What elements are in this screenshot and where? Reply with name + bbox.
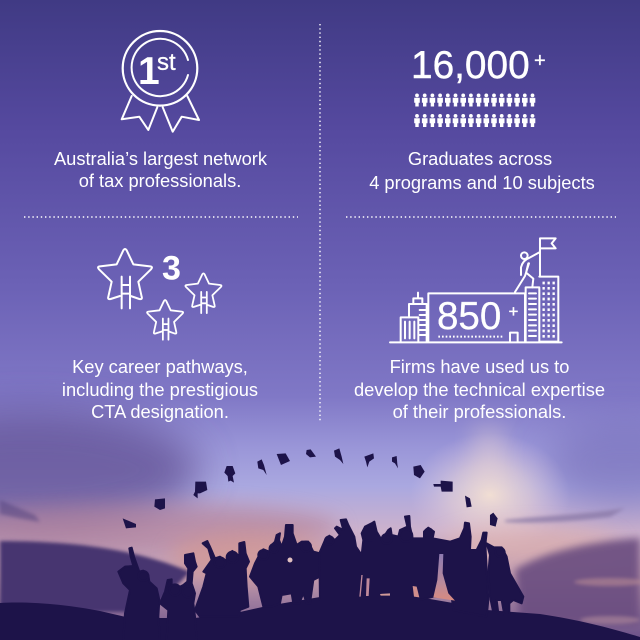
- stat: 850+: +: [508, 302, 518, 321]
- icon: first place medal: st: [157, 49, 176, 76]
- panel: firms: [354, 238, 605, 422]
- panel: career pathways: [62, 249, 258, 422]
- graduation caps: right arc: [334, 448, 498, 527]
- silhouettes: left group: [118, 525, 320, 640]
- icon: first place medal: [122, 31, 199, 132]
- icon: city skyline with climber and flag: [390, 238, 562, 342]
- stat: 850+: 850: [437, 295, 501, 338]
- text: pathways caption: including the prestigious: [62, 379, 258, 400]
- stat: 16,000+: +: [534, 50, 546, 72]
- panel: graduates: [369, 44, 595, 193]
- text: graduates caption: Graduates across: [408, 148, 552, 169]
- text: network caption: Australia’s largest network: [54, 148, 268, 169]
- gaps between figures: [433, 554, 455, 601]
- silhouettes: right group: [319, 516, 523, 617]
- icon: rows of graduates: [414, 94, 535, 127]
- text: firms caption: of their professionals.: [393, 401, 566, 422]
- hill: [0, 597, 640, 640]
- small light gap in crowd: [288, 558, 292, 562]
- icon: first place medal: 1: [138, 50, 160, 93]
- text: graduates caption: 4 programs and 10 subjects: [369, 172, 595, 193]
- stat: 3: 3: [162, 250, 181, 288]
- icon: three stars with ladders: [98, 249, 222, 340]
- graduation caps: left arc: [123, 449, 316, 528]
- text: network caption: of tax professionals.: [79, 170, 241, 191]
- text: firms caption: Firms have used us to: [390, 356, 569, 377]
- photo: graduates throwing caps: [0, 448, 640, 640]
- divider lines: [24, 24, 616, 422]
- text: pathways caption: Key career pathways,: [72, 356, 248, 377]
- panel: largest network: [54, 31, 268, 191]
- text: firms caption: develop the technical expertise: [354, 379, 605, 400]
- text: pathways caption: CTA designation.: [91, 401, 229, 422]
- stat: 16,000+: 16,000: [411, 44, 530, 87]
